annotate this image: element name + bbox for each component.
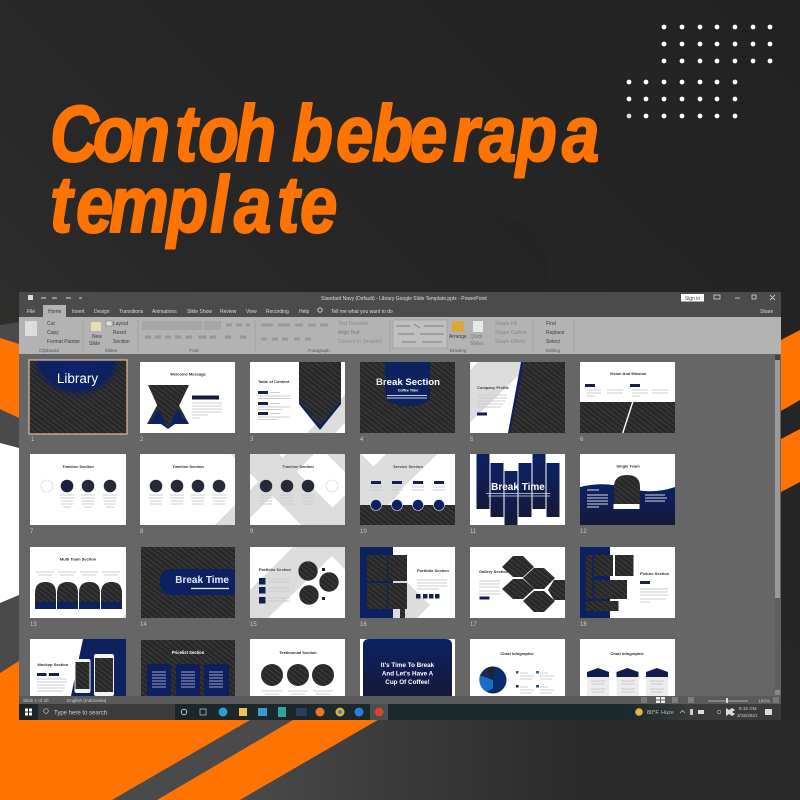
- slide 24: [580, 639, 675, 696]
- title bar and tabs: Sign in: [685, 296, 700, 302]
- slide 16: Portfolio Section: [417, 568, 450, 573]
- dot grid: [627, 25, 772, 118]
- slide 6: [580, 362, 675, 433]
- slide 24: Chart Infographic: [610, 651, 644, 656]
- slide 14: Break Time: [175, 575, 229, 586]
- slide numbers: 12: [580, 529, 587, 535]
- ribbon: Section: [113, 339, 130, 345]
- slide 18: [580, 547, 675, 618]
- slide 2: [140, 362, 235, 433]
- slide 1: Library: [57, 371, 98, 386]
- title: [50, 88, 599, 249]
- ribbon: Convert to SmartArt: [338, 339, 383, 345]
- title bar and tabs: Standard Navy (Default) - Library Google Slide Template.pptx - PowerPoint: [321, 296, 487, 302]
- ribbon: Drawing: [450, 348, 467, 353]
- slide 13: [30, 547, 126, 618]
- slide 22: [360, 639, 455, 696]
- ribbon: Styles: [470, 341, 484, 347]
- taskbar: Haze: [661, 710, 674, 716]
- slide numbers: 14: [140, 622, 147, 628]
- slide 22: It's Time To Break: [381, 662, 435, 669]
- slide 4: Coffee Time: [398, 388, 418, 392]
- title bar and tabs: View: [246, 309, 257, 315]
- ribbon: Select: [546, 339, 561, 345]
- slide numbers: 15: [250, 622, 257, 628]
- slide 21: [250, 639, 345, 696]
- title: Contoh beberapa: [50, 88, 599, 178]
- title bar and tabs: Animations: [152, 309, 177, 315]
- slide 19: [30, 639, 126, 696]
- ribbon: Slide: [89, 341, 100, 347]
- slide 3: Table of Content: [258, 379, 290, 384]
- ribbon: Clipboard: [39, 348, 59, 353]
- slide 4: Break Section: [376, 377, 440, 388]
- title bar and tabs: Slide Show: [187, 309, 212, 315]
- ribbon: Quick: [470, 334, 483, 340]
- taskbar: [19, 704, 781, 720]
- right side stripes: [781, 330, 800, 492]
- watermark: [117, 292, 605, 645]
- slide 5: [470, 362, 565, 433]
- ribbon: Copy: [47, 330, 59, 336]
- slide numbers: 6: [580, 437, 584, 443]
- slide numbers: 13: [30, 622, 37, 628]
- slide 9: [250, 454, 345, 525]
- slide numbers: 18: [580, 622, 587, 628]
- faint watermark on background: [445, 90, 690, 320]
- title bar and tabs: Recording: [266, 309, 289, 315]
- ribbon: Align Text: [338, 330, 360, 336]
- slide numbers: 8: [140, 529, 144, 535]
- ribbon: Shape Fill: [495, 321, 517, 327]
- slide 22: And Let's Have A: [382, 670, 434, 678]
- title bar and tabs: Share: [760, 309, 774, 315]
- slide 22: Cup Of Coffee!: [385, 679, 430, 686]
- slide 7: [30, 454, 126, 525]
- ribbon: Text Direction: [338, 321, 369, 327]
- slide numbers: 2: [140, 437, 144, 443]
- status bar: English (Indonesia): [67, 698, 107, 703]
- slide numbers: 10: [360, 529, 367, 535]
- slide 10: [360, 454, 455, 525]
- title bar and tabs: Insert: [72, 309, 85, 315]
- ribbon: Layout: [113, 321, 129, 327]
- slide 4: [360, 362, 455, 433]
- slide 17: [470, 547, 565, 618]
- ribbon: Arrange: [449, 334, 467, 340]
- slide 20: [141, 640, 235, 696]
- slide 23: Chart Infographic: [500, 651, 534, 656]
- slide 19: Mockup Section: [38, 662, 69, 667]
- ribbon: Cut: [47, 321, 55, 327]
- slide numbers: [30, 437, 587, 628]
- slide 2: Welcome Message: [170, 372, 207, 376]
- ribbon: Shape Outline: [495, 330, 527, 336]
- status bar: [19, 696, 781, 704]
- ribbon: Reset: [113, 330, 127, 336]
- ribbon: Replace: [546, 330, 565, 336]
- slide numbers: 1: [31, 437, 35, 443]
- title bar and tabs: Help: [299, 309, 310, 315]
- ribbon: [19, 317, 781, 354]
- slide 6: Vision And Mission: [610, 371, 647, 376]
- scrollbar: [775, 354, 780, 696]
- left side stripes: [0, 322, 19, 720]
- slide 20: Pricelist Section: [172, 650, 205, 655]
- title bar and tabs: [19, 292, 781, 317]
- slide 7: Timeline Section: [62, 464, 94, 469]
- slide 13: Multi Team Section: [60, 556, 97, 562]
- slide numbers: 7: [30, 529, 34, 535]
- slide numbers: 4: [360, 437, 364, 443]
- title bar and tabs: Transitions: [119, 309, 144, 315]
- slide 11: [470, 454, 565, 525]
- taskbar: 3/15/2021: [737, 713, 758, 718]
- slide numbers: 5: [470, 437, 474, 443]
- ribbon: Paragraph: [308, 348, 330, 353]
- ribbon: Find: [546, 321, 556, 327]
- powerpoint window: [19, 292, 781, 720]
- status bar: Slide 1 of 30: [23, 698, 49, 703]
- slide 12: Single Team: [616, 464, 640, 468]
- slide numbers: 3: [250, 437, 254, 443]
- slide numbers: 9: [250, 529, 254, 535]
- title bar and tabs: Home: [48, 309, 62, 315]
- slide 9: Timeline Section: [282, 464, 314, 469]
- slide 23: [470, 639, 565, 696]
- slide 5: Company Profile: [477, 385, 510, 390]
- title bar and tabs: Design: [94, 309, 110, 315]
- slide numbers: 11: [470, 529, 477, 535]
- slide 8: [140, 454, 235, 525]
- slide 21: Testimonial Section: [279, 650, 317, 655]
- title bar and tabs: File: [27, 309, 35, 315]
- taskbar: 8:15 GM: [739, 706, 757, 711]
- bottom orange stripes: [0, 661, 800, 800]
- ribbon: Format Painter: [47, 339, 80, 345]
- ribbon: Slides: [105, 348, 118, 353]
- ribbon: Font: [189, 348, 199, 353]
- ribbon: Editing: [546, 348, 560, 353]
- slide 10: Service Section: [393, 464, 423, 469]
- title bar and tabs: Tell me what you want to do: [331, 309, 393, 315]
- slide 8: Timeline Section: [172, 464, 204, 469]
- ribbon: New: [92, 334, 102, 340]
- taskbar: 80°F: [647, 710, 659, 716]
- slide 16: [360, 547, 455, 618]
- slide 3: [250, 362, 345, 433]
- slide 18: Picture Section: [640, 571, 670, 576]
- title bar and tabs: Review: [220, 309, 237, 315]
- title: template: [50, 159, 337, 249]
- taskbar: Type here to search: [54, 710, 107, 716]
- slide numbers: 17: [470, 622, 477, 628]
- slide 15: [250, 547, 345, 618]
- ribbon: Shape Effects: [495, 339, 527, 345]
- slide 17: Gallery Section: [479, 569, 509, 574]
- slide 14: [141, 547, 235, 618]
- status bar: 100%: [758, 698, 771, 704]
- slide numbers: 16: [360, 622, 367, 628]
- slide 1: [28, 359, 128, 435]
- slide 12: [580, 454, 675, 525]
- slide 15: Portfolio Section: [259, 567, 292, 572]
- slide 11: Break Time: [491, 482, 545, 493]
